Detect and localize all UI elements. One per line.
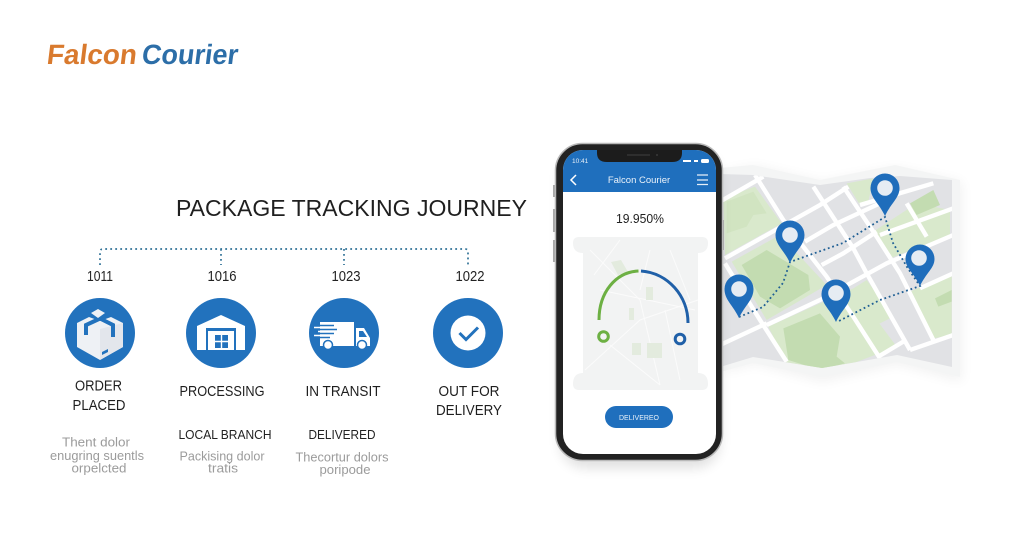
step 3 label: IN TRANSIT (306, 384, 381, 400)
step 1: order placed (50, 269, 144, 476)
dotted timeline connector (100, 249, 468, 265)
step 1 number: 1011 (87, 269, 113, 285)
delivered button: DELIVEREO (619, 413, 659, 422)
logo (45, 39, 240, 70)
step 2 description: Packising dolor (180, 450, 264, 464)
pin 3 (822, 280, 850, 322)
phone notch (597, 150, 682, 162)
infographic canvas (48, 44, 960, 476)
step 4: out for delivery: DELIVERY (436, 403, 502, 419)
step 1 label: ORDER (75, 378, 122, 394)
icon: check mark (433, 298, 503, 368)
app header: 10:41 (572, 158, 589, 165)
pin 1 (724, 274, 754, 318)
step 1 description: Thent dolor (62, 436, 130, 450)
smartphone (553, 144, 724, 468)
map pins (724, 174, 934, 322)
step 2 description (180, 450, 264, 476)
step 2: processing (178, 269, 272, 476)
pin 2 (776, 220, 804, 263)
dotted route (739, 217, 920, 322)
step 1: order placed: PLACED (72, 398, 126, 414)
step 3 description: Thecortur dolors (296, 450, 388, 464)
folded city map (720, 160, 962, 385)
step 3 sublabel: DELIVERED (308, 428, 376, 442)
step 3: in transit (296, 269, 388, 477)
step 3 number: 1023 (332, 269, 360, 285)
phone screen (563, 150, 716, 454)
percentage readout: 19.950% (616, 212, 664, 226)
step 2 number: 1016 (208, 269, 236, 285)
step 3 description (296, 450, 388, 477)
step 2 sublabel: LOCAL BRANCH (178, 428, 272, 442)
pin 4 (870, 174, 900, 216)
logo: Falcon (45, 39, 139, 70)
step 2 label: PROCESSING (180, 384, 264, 400)
app header (563, 150, 716, 192)
map green areas (723, 178, 952, 373)
delivered button (605, 406, 673, 428)
icon: package box (65, 298, 135, 368)
step 4: out for delivery (433, 269, 503, 419)
icon: warehouse (186, 298, 256, 368)
progress gauge (599, 271, 688, 344)
step 2 description: tratis (208, 462, 238, 476)
step 4 number: 1022 (456, 269, 484, 285)
pin 5 (906, 245, 934, 286)
step 1 description: orpelcted (72, 462, 127, 476)
step 4 label: OUT FOR (438, 384, 500, 400)
step 1 description: enugring suentls (50, 449, 144, 463)
title: PACKAGE TRACKING JOURNEY (176, 195, 527, 221)
mini map panel (573, 237, 708, 390)
app header: Falcon Courier (608, 175, 670, 186)
logo: Courier (140, 39, 240, 70)
step 3 description: poripode (320, 463, 371, 477)
step 1 description (50, 436, 144, 476)
icon: delivery truck (309, 298, 379, 368)
